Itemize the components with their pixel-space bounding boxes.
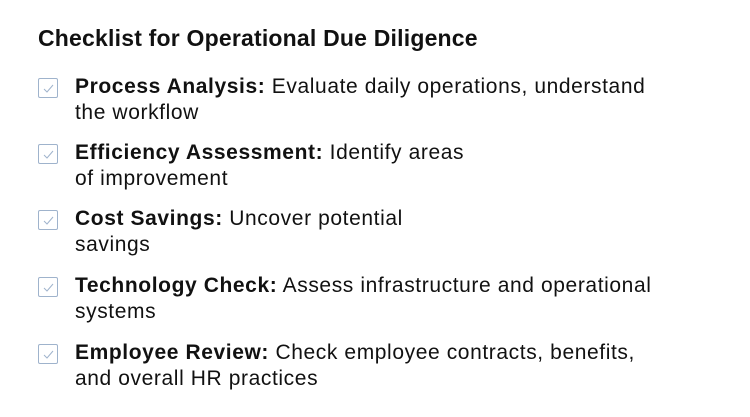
text: cost savings: Cost Savings: Uncover potential: [75, 207, 403, 230]
text: technology: Technology Check: Assess infrastructure and operational: [75, 274, 652, 297]
item: efficiency: [38, 141, 464, 190]
item: technology: [38, 274, 652, 323]
text: employee: Employee Review: Check employee contracts, benefits,: [75, 341, 635, 364]
text: process analysis: the workflow: [75, 101, 199, 124]
text: employee: and overall HR practices: [75, 367, 318, 390]
text: efficiency: [75, 141, 464, 190]
icon: checkbox: [38, 210, 58, 230]
icon: checkbox: [38, 277, 58, 297]
item: employee: [38, 341, 635, 390]
text: employee: [75, 341, 635, 390]
text: cost savings: [75, 207, 403, 256]
text: efficiency: of improvement: [75, 167, 228, 190]
icon: checkbox: [38, 144, 58, 164]
item: cost savings: [38, 207, 403, 256]
text: cost savings: savings: [75, 233, 150, 256]
text: process analysis: [75, 75, 645, 124]
text: technology: systems: [75, 300, 156, 323]
item: process analysis: [38, 75, 645, 124]
icon: checkbox: [38, 344, 58, 364]
icon: checkbox: [38, 78, 58, 98]
title: Checklist for Operational Due Diligence: [38, 25, 478, 51]
text: technology: [75, 274, 652, 323]
text: efficiency: Efficiency Assessment: Identify areas: [75, 141, 464, 164]
text: process analysis: Process Analysis: Evaluate daily operations, understand: [75, 75, 645, 98]
